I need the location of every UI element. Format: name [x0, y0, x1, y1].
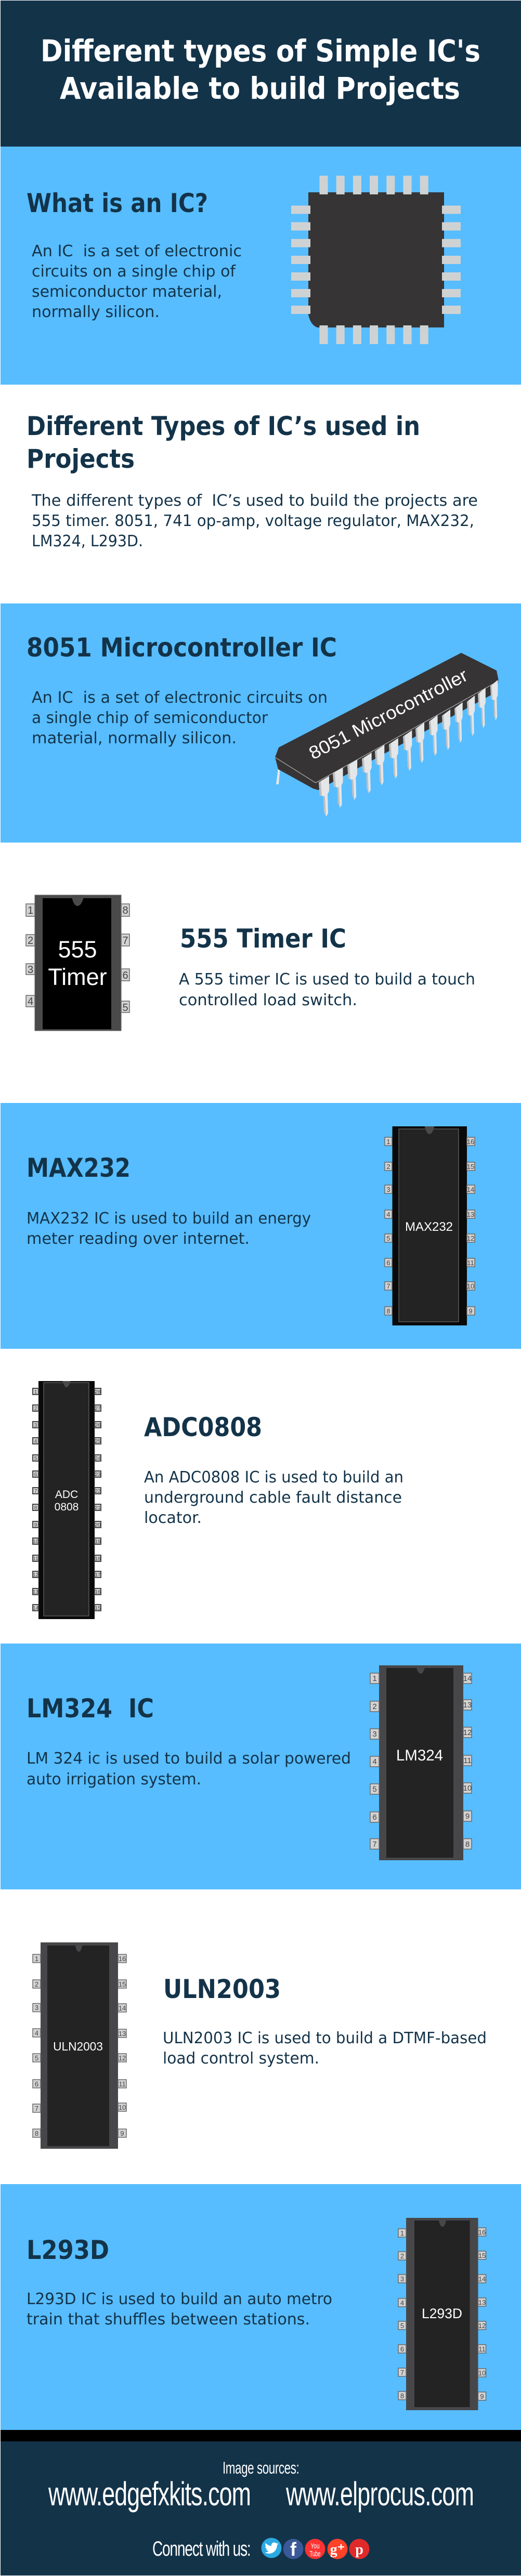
icon: 555 timer chip: 6: [122, 970, 128, 981]
icon: 555 timer chip: 555: [58, 936, 97, 963]
heading: different types: Different Types of IC’s used in: [27, 411, 420, 441]
icon: MAX232 chip: 7: [386, 1282, 390, 1290]
icon: ADC0808 chip: 15: [95, 1606, 101, 1611]
icon: ADC0808 chip: 6: [34, 1472, 37, 1478]
icon: ADC0808 chip: 9: [34, 1522, 37, 1528]
icon: LM324 chip: 13: [463, 1701, 472, 1710]
icon: LM324 chip: 12: [463, 1728, 472, 1737]
icon: google plus: [328, 2539, 347, 2559]
icon: ADC0808 chip: 7: [34, 1489, 37, 1494]
text block: MAX232 use: meter reading over internet.: [27, 1230, 250, 1248]
text block: 555 use: A 555 timer IC is used to build a touch: [179, 970, 475, 989]
heading: ADC0808: ADC0808: [144, 1412, 262, 1442]
icon: ADC0808 chip: 13: [33, 1589, 38, 1595]
icon: L293D chip: 4: [400, 2299, 404, 2307]
panel: LM324: [1, 1644, 521, 1889]
panel: what is an IC: [1, 147, 521, 385]
icon: LM324 chip: 1: [372, 1674, 377, 1683]
icon: ULN2003 chip: 9: [120, 2130, 124, 2137]
panel: footer: [1, 2430, 521, 2575]
icon: L293D chip: 12: [478, 2322, 486, 2330]
icon: ULN2003 chip: 16: [119, 1955, 126, 1963]
title: [41, 33, 480, 106]
icon: ADC0808 chip: 3: [34, 1423, 37, 1428]
icon: ADC0808 chip: 5: [34, 1456, 37, 1462]
text block: 555 use: controlled load switch.: [179, 991, 357, 1009]
icon: ULN2003 chip: 14: [119, 2004, 126, 2012]
text block: list of types: 555 timer. 8051, 741 op-amp, voltage regulator, MAX232,: [32, 512, 474, 530]
icon: ULN2003 chip: 7: [35, 2105, 38, 2112]
icon: LM324 chip: 14: [463, 1674, 472, 1683]
icon: pinterest: p: [355, 2542, 363, 2558]
icon: 555 timer chip: Timer: [48, 964, 107, 990]
icon: ADC0808 chip: 22: [95, 1489, 101, 1494]
icon: google plus: g⁺: [330, 2542, 345, 2558]
icon: L293D chip: 2: [400, 2252, 404, 2260]
heading: L293D: L293D: [27, 2235, 109, 2265]
text block: IC definition: [32, 242, 242, 321]
icon: L293D chip: 14: [478, 2275, 486, 2283]
icon: 555 timer chip: 8: [122, 905, 128, 916]
icon: L293D chip: [398, 2218, 486, 2410]
text block: IC definition: circuits on a single chip of: [32, 262, 237, 281]
text block: MAX232 use: MAX232 IC is used to build an energy: [27, 1210, 311, 1228]
icon: ADC0808 chip: 2: [34, 1406, 37, 1412]
icon: LM324 chip: [370, 1665, 472, 1860]
icon: ULN2003 chip: 8: [35, 2130, 38, 2137]
icon: ULN2003 chip: 10: [119, 2104, 126, 2111]
heading: different types: Projects: [27, 444, 135, 474]
icon: ADC0808 chip: 18: [95, 1556, 101, 1562]
title: Available to build Projects: [60, 71, 460, 106]
panel: 555 timer: [26, 895, 475, 1031]
heading: different types: [27, 411, 420, 474]
icon: ADC0808 chip: 17: [95, 1572, 101, 1578]
heading: ULN2003: ULN2003: [163, 1974, 281, 2004]
panel: ADC0808: [33, 1381, 403, 1619]
icon: ADC0808 chip: 26: [95, 1423, 101, 1428]
icon: ADC0808 chip: 1: [34, 1389, 37, 1395]
text block: 8051 description: [32, 689, 328, 747]
icon: LM324 chip: 6: [372, 1813, 377, 1822]
icon: ADC0808 chip: 12: [33, 1572, 38, 1578]
text: connect with us: Connect with us:: [152, 2538, 251, 2560]
icon: 555 timer chip: 5: [122, 1002, 128, 1014]
icon: ADC0808 chip: 11: [33, 1556, 38, 1562]
icon: ADC0808 chip: [33, 1381, 101, 1619]
icon: twitter: [261, 2538, 282, 2558]
text block: ULN2003 use: ULN2003 IC is used to build a DTMF-based: [163, 2029, 487, 2047]
icon: youtube: You: [311, 2542, 319, 2551]
heading: what is an IC: What is an IC?: [27, 188, 208, 218]
text block: ADC0808 use: An ADC0808 IC is used to build an: [144, 1468, 403, 1487]
text: source URLs: www.edgefxkits.com: [48, 2475, 251, 2513]
icon: ADC0808 chip: 4: [34, 1439, 37, 1444]
icon: LM324 chip: 3: [372, 1730, 377, 1739]
icon: ADC0808 chip: 21: [95, 1505, 101, 1511]
icon: ADC0808 chip: ADC: [55, 1489, 78, 1501]
icon: 8051 DIP chip: [275, 653, 499, 817]
text block: IC definition: semiconductor material,: [32, 283, 222, 301]
icon: MAX232 chip: 10: [467, 1282, 474, 1290]
icon: MAX232 chip: 13: [467, 1211, 474, 1218]
icon: 8051 DIP chip: 8051 Microcontroller: [306, 665, 471, 764]
icon: MAX232 chip: 16: [467, 1138, 474, 1146]
icon: MAX232 chip: 4: [386, 1211, 390, 1218]
text block: 555 use: [179, 970, 475, 1009]
icon: ADC0808 chip: 0808: [55, 1501, 79, 1513]
icon: pinterest: [349, 2539, 369, 2559]
icon: MAX232 chip: 9: [468, 1307, 473, 1315]
icon: ULN2003 chip: 12: [119, 2054, 126, 2062]
icon: LM324 chip: 11: [463, 1756, 472, 1765]
icon: ADC0808 chip: 23: [95, 1472, 101, 1478]
icon: 555 timer chip: 7: [122, 935, 128, 947]
icon: LM324 chip: 7: [372, 1840, 377, 1849]
text block: ADC0808 use: [144, 1468, 403, 1527]
text block: L293D use: [27, 2290, 332, 2329]
icon: ADC0808 chip: 19: [95, 1539, 101, 1545]
icon: MAX232 chip: MAX232: [405, 1220, 453, 1234]
icon: L293D chip: 15: [478, 2252, 486, 2259]
text block: ULN2003 use: [163, 2029, 487, 2068]
icon: ADC0808 chip: 25: [95, 1439, 101, 1444]
icon: MAX232 chip: 14: [467, 1186, 474, 1193]
icon: MAX232 chip: 3: [386, 1186, 390, 1193]
icon: youtube: Tube: [310, 2549, 320, 2558]
icon: MAX232 chip: 2: [386, 1163, 390, 1171]
text block: IC definition: An IC is a set of electronic: [32, 242, 242, 260]
icon: L293D chip: 1: [400, 2229, 404, 2237]
icon: ULN2003 chip: 13: [119, 2030, 126, 2038]
icon: ULN2003 chip: ULN2003: [53, 2040, 103, 2053]
icon: ADC0808 chip: 10: [33, 1539, 38, 1545]
text block: LM324 use: [27, 1750, 351, 1789]
icon: LM324 chip: LM324: [396, 1747, 443, 1764]
icon: ULN2003 chip: 5: [35, 2054, 38, 2062]
icon: LM324 chip: 2: [372, 1702, 377, 1711]
icon: MAX232 chip: 6: [386, 1259, 390, 1267]
text block: IC definition: normally silicon.: [32, 303, 160, 321]
icon: L293D chip: 11: [478, 2345, 486, 2353]
icon: L293D chip: 9: [480, 2393, 484, 2400]
icon: 555 timer chip: 2: [28, 935, 33, 947]
heading: 555 timer: 555 Timer IC: [180, 924, 346, 954]
icon: L293D chip: L293D: [422, 2306, 462, 2321]
icon: LM324 chip: 4: [372, 1757, 377, 1766]
icon: youtube: [305, 2539, 325, 2559]
icon: MAX232 chip: 15: [467, 1163, 474, 1171]
icon: MAX232 chip: 12: [467, 1234, 474, 1242]
icon: ADC0808 chip: 14: [33, 1606, 38, 1611]
heading: MAX232: MAX232: [27, 1153, 131, 1183]
icon: facebook: [283, 2539, 304, 2560]
heading: 8051: 8051 Microcontroller IC: [27, 633, 337, 663]
icon: ADC0808 chip: 24: [95, 1456, 101, 1462]
icon: ULN2003 chip: 6: [35, 2080, 38, 2088]
icon: ULN2003 chip: 15: [119, 1980, 126, 1988]
panel: 8051 microcontroller: [1, 603, 521, 843]
icon: LM324 chip: 10: [463, 1784, 472, 1793]
text block: LM324 use: LM 324 ic is used to build a solar powered: [27, 1750, 351, 1768]
icon: ADC0808 chip: 8: [34, 1505, 37, 1511]
panel: different types of ICs: [27, 411, 478, 550]
icon: MAX232 chip: 11: [467, 1259, 474, 1267]
icon: MAX232 chip: 5: [386, 1234, 390, 1242]
text: source URLs: [48, 2475, 474, 2513]
icon: L293D chip: 10: [478, 2369, 486, 2377]
icon: L293D chip: 5: [400, 2322, 404, 2330]
icon: L293D chip: 16: [478, 2228, 486, 2236]
icon: 555 timer chip: 3: [28, 964, 33, 976]
text block: 8051 description: material, normally silicon.: [32, 729, 237, 747]
icon: LM324 chip: 9: [465, 1812, 470, 1821]
icon: ULN2003 chip: 2: [35, 1980, 38, 1988]
text block: list of types: The different types of IC’s used to build the projects are: [31, 492, 478, 510]
text block: list of types: [31, 492, 478, 550]
panel: title header: [1, 1, 521, 147]
text block: list of types: LM324, L293D.: [32, 532, 143, 550]
icon: LM324 chip: 5: [372, 1785, 377, 1794]
text block: 8051 description: a single chip of semiconductor: [32, 709, 268, 727]
icon: facebook: f: [290, 2539, 297, 2560]
text block: ADC0808 use: locator.: [144, 1509, 202, 1527]
icon: MAX232 chip: 8: [386, 1307, 390, 1315]
title: Different types of Simple IC's: [41, 33, 480, 69]
icon: ULN2003 chip: [33, 1942, 126, 2149]
icon: L293D chip: 7: [400, 2369, 404, 2376]
icon: MAX232 chip: [385, 1126, 475, 1325]
icon: ADC0808 chip: 20: [95, 1522, 101, 1528]
text block: L293D use: train that shuffles between stations.: [27, 2310, 310, 2329]
icon: L293D chip: 3: [400, 2275, 404, 2283]
text block: L293D use: L293D IC is used to build an auto metro: [27, 2290, 332, 2308]
icon: ADC0808 chip: 28: [95, 1389, 101, 1395]
icon: ULN2003 chip: 4: [35, 2029, 38, 2037]
icon: ULN2003 chip: 3: [35, 2004, 38, 2012]
icon: MAX232 chip: 1: [386, 1138, 390, 1146]
text: source URLs: www.elprocus.com: [285, 2475, 474, 2513]
text block: LM324 use: auto irrigation system.: [27, 1770, 201, 1789]
text block: ULN2003 use: load control system.: [163, 2049, 319, 2068]
text block: 8051 description: An IC is a set of electronic circuits on: [32, 689, 328, 707]
icon: 555 timer chip: 1: [28, 905, 33, 916]
icon: L293D chip: 6: [400, 2345, 404, 2353]
heading: LM324: LM324 IC: [27, 1693, 154, 1724]
icon: ADC0808 chip: 16: [95, 1589, 101, 1595]
text: image sources label: Image sources:: [223, 2459, 299, 2477]
text block: ADC0808 use: underground cable fault distance: [144, 1489, 402, 1507]
icon: ULN2003 chip: 11: [119, 2080, 126, 2088]
icon: L293D chip: 8: [400, 2392, 404, 2400]
panel: ULN2003: [33, 1942, 487, 2149]
icon: L293D chip: 13: [478, 2298, 486, 2306]
text block: MAX232 use: [27, 1210, 311, 1248]
panel: L293D: [1, 2184, 521, 2430]
icon: 555 timer chip: [26, 895, 129, 1031]
panel: MAX232: [1, 1103, 521, 1349]
icon: square IC chip: [291, 176, 461, 344]
icon: LM324 chip: 8: [465, 1840, 470, 1849]
icon: 555 timer chip: 4: [28, 996, 33, 1007]
icon: ADC0808 chip: 27: [95, 1406, 101, 1412]
icon: ULN2003 chip: 1: [35, 1955, 38, 1963]
